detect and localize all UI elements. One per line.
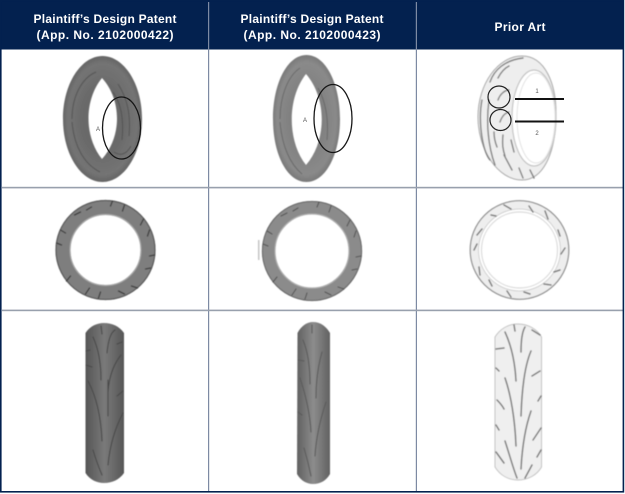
tire 2: front tread view	[297, 322, 330, 484]
prior art tire: front tread line drawing	[495, 324, 542, 480]
label 2: 2	[535, 131, 539, 137]
callout line lower	[515, 120, 564, 122]
highlight ellipse	[102, 97, 140, 159]
header: prior art: Prior Art	[494, 20, 546, 34]
header: plaintiff patent 2102000423	[240, 12, 384, 42]
tire 2: perspective view	[273, 55, 352, 182]
tire 2: side view	[258, 201, 362, 301]
prior art tire: perspective line drawing	[478, 56, 564, 180]
header: plaintiff patent 2102000422: Plaintiff’s Design Patent	[34, 12, 176, 26]
callout circle lower	[490, 110, 511, 130]
label A: A	[303, 118, 307, 124]
header: plaintiff patent 2102000422: (App. No. 2102000422)	[36, 28, 174, 42]
callout line upper	[515, 98, 564, 100]
tire 1: perspective view	[63, 56, 142, 182]
header: plaintiff patent 2102000422	[34, 12, 176, 42]
prior art tire: side view line drawing	[470, 201, 569, 299]
header: plaintiff patent 2102000423: (App. No. 2102000423)	[244, 28, 380, 42]
callout circle upper	[488, 86, 510, 108]
tire 1: side view	[56, 200, 155, 300]
label 1: 1	[535, 89, 539, 95]
tire 1: front tread view	[86, 323, 124, 483]
header band	[1, 1, 624, 50]
header: plaintiff patent 2102000423: Plaintiff’s Design Patent	[240, 12, 384, 26]
label A: A	[96, 127, 100, 133]
highlight ellipse	[314, 84, 352, 152]
stray edge mark	[258, 240, 260, 260]
